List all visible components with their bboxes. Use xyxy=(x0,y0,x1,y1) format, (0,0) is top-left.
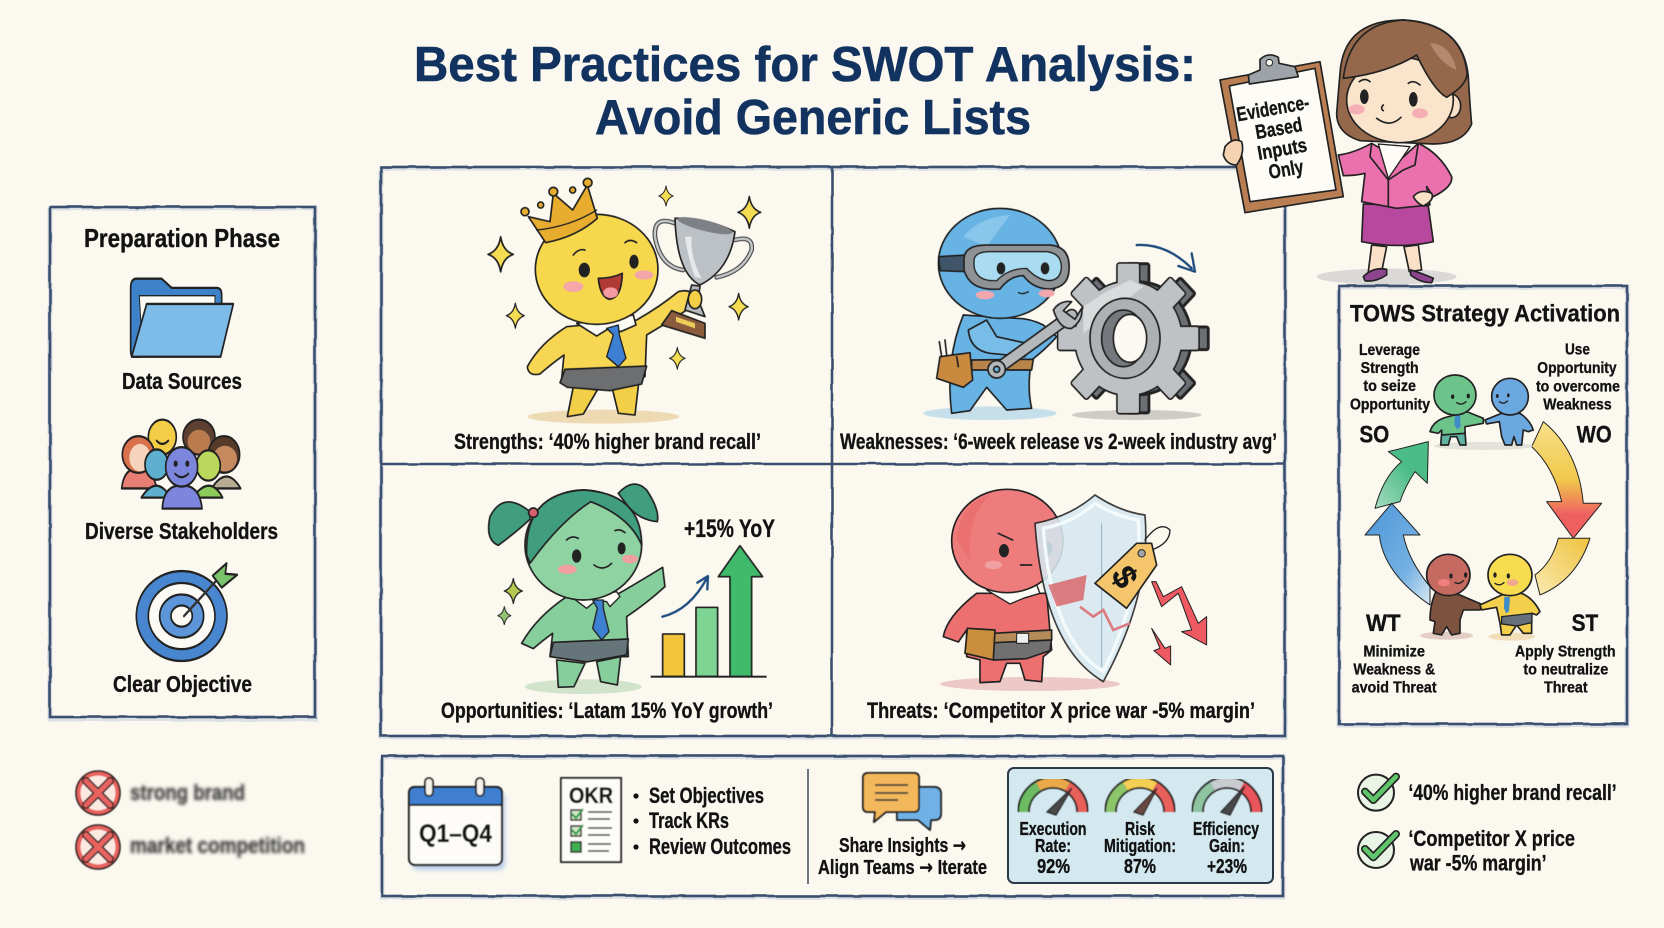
text: WO strategy: WO xyxy=(1577,422,1612,449)
text: competitor example: war -5% margin’ xyxy=(1409,851,1547,876)
icon: rejected item one xyxy=(76,771,120,815)
text: share insights: Align Teams → Iterate xyxy=(818,855,987,879)
quadrant: weaknesses xyxy=(840,208,1277,454)
quadrant: strengths xyxy=(454,178,761,454)
text: SO strategy: Strength xyxy=(1361,360,1419,377)
illustration: blue character with goggles, wrench and gear xyxy=(923,208,1208,420)
label: clear objective: Clear Objective xyxy=(113,671,252,697)
panel: SWOT grid xyxy=(381,167,1285,737)
characters: SO and WO handshake xyxy=(1430,375,1533,450)
icon: Q1-Q4 calendar: Q1–Q4 xyxy=(419,820,492,848)
text: WT strategy: avoid Threat xyxy=(1352,680,1437,697)
character: presenter with evidence clipboard: Inputs xyxy=(1256,135,1309,165)
caption: opportunities: Opportunities: ‘Latam 15% YoY growth’ xyxy=(441,698,773,723)
text: ST strategy: to neutralize xyxy=(1523,661,1608,678)
panel: preparation phase xyxy=(50,207,315,719)
text: WT strategy xyxy=(1352,610,1437,697)
text: WT strategy: WT xyxy=(1366,610,1401,637)
illustration: green character with growth chart xyxy=(489,484,767,694)
panel: evidence-based good examples xyxy=(1358,775,1617,876)
text: share insights xyxy=(818,833,987,879)
chart label: +15% YoY: +15% YoY xyxy=(684,515,775,543)
gauge: risk mitigation xyxy=(1104,782,1176,878)
arrow: yellow to red SO to WO xyxy=(1532,422,1602,538)
text: ST strategy xyxy=(1515,610,1616,697)
list: OKR steps xyxy=(633,783,791,859)
icon: speech bubbles xyxy=(863,773,941,830)
text: SO strategy: SO xyxy=(1359,422,1389,449)
caption: weaknesses: Weaknesses: ‘6-week release vs 2-week industry avg’ xyxy=(840,429,1277,454)
blurred text: market competition: market competition xyxy=(130,833,305,858)
icon: OKR checklist card xyxy=(561,778,621,862)
text: ST strategy: Apply Strength xyxy=(1515,644,1616,661)
gauge: efficiency gain: Gain: xyxy=(1209,835,1245,856)
label: data sources: Data Sources xyxy=(122,368,242,394)
character: presenter with evidence clipboard xyxy=(1220,20,1472,285)
quadrant: threats xyxy=(867,489,1255,723)
icon: diverse stakeholders xyxy=(122,420,241,509)
gauge: execution rate xyxy=(1020,782,1086,878)
gauge: efficiency gain xyxy=(1193,782,1260,878)
caption: strengths: Strengths: ‘40% higher brand recall’ xyxy=(454,429,761,454)
panel: TOWS strategy activation xyxy=(1339,286,1627,725)
text: SO strategy: Opportunity xyxy=(1350,396,1430,413)
gauge: risk mitigation: Mitigation: xyxy=(1104,835,1176,856)
title: Avoid Generic Lists xyxy=(595,91,1031,145)
icon: target xyxy=(136,563,237,661)
text: SO strategy: to seize xyxy=(1363,378,1416,395)
arrow: yellow WO to ST xyxy=(1535,538,1590,595)
icon: Q1-Q4 calendar xyxy=(409,778,505,870)
text: SO strategy xyxy=(1350,342,1430,449)
text: ST strategy: ST xyxy=(1572,610,1599,637)
text: share insights: Share Insights → xyxy=(839,833,966,857)
text: WO strategy: Weakness xyxy=(1543,396,1612,413)
text: competitor example: ‘Competitor X price xyxy=(1408,826,1575,851)
panel: execution strip xyxy=(382,756,1283,897)
gauge: risk mitigation: 87% xyxy=(1124,856,1156,878)
panel: generic items to avoid xyxy=(76,771,305,869)
label: diverse stakeholders: Diverse Stakeholders xyxy=(85,518,278,544)
text: WT strategy: Weakness & xyxy=(1353,661,1435,678)
icon: folder xyxy=(131,279,233,357)
gauge: execution rate: Execution xyxy=(1020,818,1086,839)
list: OKR steps: Set Objectives xyxy=(649,783,764,808)
character: presenter with evidence clipboard: Based xyxy=(1254,114,1304,144)
text: competitor example xyxy=(1408,826,1575,876)
icon: check mark two xyxy=(1358,832,1396,868)
text: WO strategy xyxy=(1536,341,1620,449)
text: WO strategy: Opportunity xyxy=(1537,360,1617,377)
text: WT strategy: Minimize xyxy=(1363,644,1425,661)
gauge: efficiency gain: Efficiency xyxy=(1193,818,1260,839)
icon: check mark one xyxy=(1358,775,1396,811)
heading: TOWS strategy activation: TOWS Strategy Activation xyxy=(1350,301,1620,328)
title xyxy=(414,38,1196,145)
quadrant: opportunities xyxy=(441,484,775,723)
illustration: red character with shield and price tag: $ xyxy=(1103,560,1145,595)
arrow: green ST to SO xyxy=(1375,442,1428,508)
list: OKR steps: Track KRs xyxy=(649,808,729,833)
gauge: efficiency gain: +23% xyxy=(1207,856,1247,878)
arrow: blue ST to WT xyxy=(1365,503,1430,605)
text: WO strategy: to overcome xyxy=(1536,379,1620,396)
icon: rejected item two xyxy=(76,825,120,869)
panel: KPI gauges xyxy=(1008,768,1273,883)
character: presenter with evidence clipboard: Evidence- xyxy=(1235,92,1311,126)
title: Best Practices for SWOT Analysis: xyxy=(414,38,1196,92)
text: ST strategy: Threat xyxy=(1544,680,1588,697)
gauge: execution rate: Rate: xyxy=(1035,835,1071,856)
illustration: red character with shield and price tag xyxy=(940,489,1207,691)
gauge: execution rate: 92% xyxy=(1037,856,1070,878)
list: OKR steps: Review Outcomes xyxy=(649,834,791,859)
text: SO strategy: Leverage xyxy=(1359,342,1420,359)
character: presenter with evidence clipboard: Only xyxy=(1267,156,1305,184)
illustration: yellow character with crown and trophy xyxy=(488,178,761,424)
heading: preparation phase: Preparation Phase xyxy=(84,223,280,253)
characters: WT and ST handshake xyxy=(1420,554,1540,641)
caption: threats: Threats: ‘Competitor X price war -5% margin’ xyxy=(867,698,1255,723)
text: brand recall example: ‘40% higher brand recall’ xyxy=(1408,780,1617,805)
icon: OKR checklist card: OKR xyxy=(569,783,613,808)
gauge: risk mitigation: Risk xyxy=(1125,818,1156,839)
text: WO strategy: Use xyxy=(1565,341,1590,358)
blurred text: strong brand: strong brand xyxy=(130,780,245,805)
